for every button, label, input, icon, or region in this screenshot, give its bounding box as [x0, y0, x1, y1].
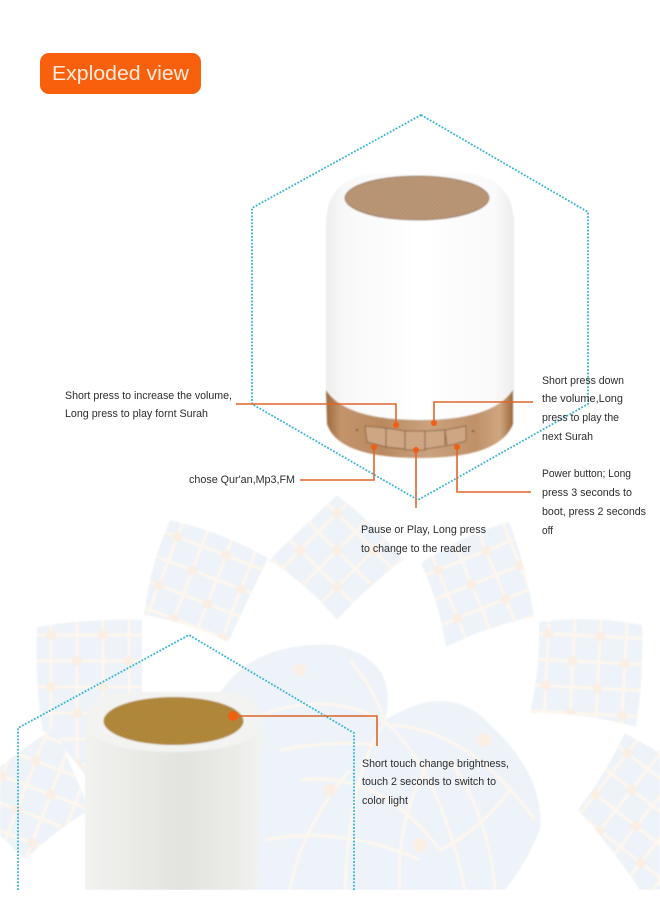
callout: volume up: Long press to play fornt Surah	[65, 408, 208, 420]
callout dots: main lamp	[371, 420, 460, 453]
gold band	[326, 390, 513, 458]
callout: power: boot, press 2 seconds	[542, 506, 646, 518]
callout: brightness: Short touch change brightness,	[362, 758, 509, 770]
callout: brightness: touch 2 seconds to switch to	[362, 776, 496, 788]
callout: power: Power button; Long	[542, 468, 631, 480]
main lamp	[326, 173, 514, 458]
callout: brightness	[362, 758, 509, 807]
callout line: brightness	[233, 716, 377, 746]
callout: volume down: press to play the	[542, 412, 619, 424]
title badge	[40, 53, 201, 94]
title badge: Exploded view	[52, 62, 189, 85]
background: lotus tile pattern	[0, 495, 660, 890]
callout: volume up: Short press to increase the volume,	[65, 390, 232, 402]
callout: power: off	[542, 525, 554, 537]
speaker grille	[345, 176, 489, 220]
dotted hexagon: main lamp	[252, 115, 588, 500]
lamp body	[326, 173, 514, 430]
callout: brightness: color light	[362, 795, 408, 807]
callout dot: brightness	[228, 711, 238, 721]
callout: volume down: Short press down	[542, 375, 624, 387]
callout: volume down: next Surah	[542, 431, 593, 443]
callout: volume down: the volume,Long	[542, 393, 623, 405]
callout: mode: chose Qur'an,Mp3,FM	[189, 474, 295, 486]
callout: pause or play	[361, 524, 486, 555]
callout: power	[542, 468, 646, 537]
second lamp	[85, 692, 263, 890]
callout: volume down	[542, 375, 624, 443]
callout: power: press 3 seconds to	[542, 487, 632, 499]
dotted hexagon: second lamp	[18, 635, 354, 890]
callout: pause or play: Pause or Play, Long press	[361, 524, 486, 536]
lamp body	[85, 692, 263, 890]
bottom white strip	[0, 890, 660, 900]
speaker grille	[104, 697, 244, 745]
top rim	[85, 692, 263, 752]
callout: pause or play: to change to the reader	[361, 543, 471, 555]
button row	[356, 426, 474, 450]
callout lines: main lamp	[236, 402, 533, 508]
callout: volume up	[65, 390, 232, 420]
